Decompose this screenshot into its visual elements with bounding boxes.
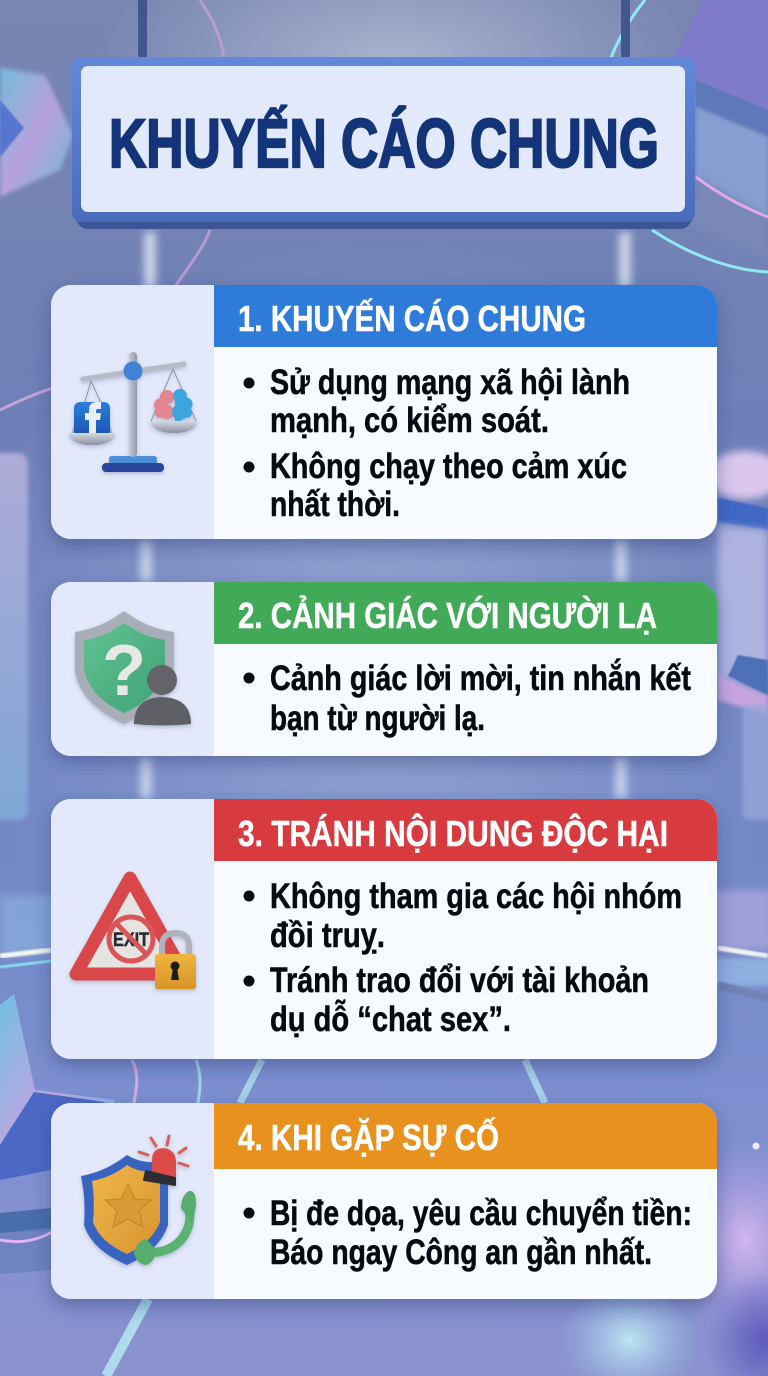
heading 3: 3. TRÁNH NỘI DUNG ĐỘC HẠI <box>238 812 668 854</box>
icon: police badge, siren and phone <box>81 1136 196 1265</box>
header bar 1 <box>214 285 717 347</box>
bullets 1: Sử dụng mạng xã hội lành <box>270 363 630 402</box>
header bar 4 <box>214 1103 717 1169</box>
heading 1: 1. KHUYẾN CÁO CHUNG <box>238 298 586 339</box>
title sign <box>72 57 695 229</box>
bullets 1: Không chạy theo cảm xúc <box>270 447 627 486</box>
panel: card 4 when in trouble <box>51 1103 717 1299</box>
heading 2: 2. CẢNH GIÁC VỚI NGƯỜI LẠ <box>238 594 657 636</box>
bullets 3: dụ dỗ “chat sex”. <box>270 999 511 1039</box>
bullets 1: nhất thời. <box>270 485 400 524</box>
icon: shield with question and person <box>75 611 191 726</box>
panel: card 3 harmful content <box>51 799 717 1059</box>
header bar 3 <box>214 799 717 861</box>
bullets 2: Cảnh giác lời mời, tin nhắn kết <box>270 658 691 698</box>
bullets 3: đồi truỵ. <box>270 916 385 955</box>
bullets 4 <box>244 1194 692 1272</box>
bullets 3 <box>244 877 682 1039</box>
bullets 4: Báo ngay Công an gần nhất. <box>270 1233 652 1272</box>
bullets 1 <box>244 363 630 524</box>
bullets 3: Không tham gia các hội nhóm <box>270 877 682 916</box>
bullets 3: Tránh trao đổi với tài khoản <box>270 961 649 1000</box>
icon: no exit warning and padlock: EXIT <box>113 930 149 951</box>
bullets 1: mạnh, có kiểm soát. <box>270 401 549 440</box>
icon: shield with question and person: ? <box>102 631 146 711</box>
panel: card 2 stranger caution <box>51 582 717 756</box>
bullets 2 <box>244 658 691 738</box>
heading 4: 4. KHI GẶP SỰ CỐ <box>238 1116 499 1158</box>
header bar 2 <box>214 582 717 644</box>
icon: no exit warning and padlock <box>76 878 196 989</box>
icon: scale with facebook and brain <box>68 352 198 472</box>
bullets 2: bạn từ người lạ. <box>270 699 485 738</box>
panel: card 1 general advice <box>51 285 717 539</box>
